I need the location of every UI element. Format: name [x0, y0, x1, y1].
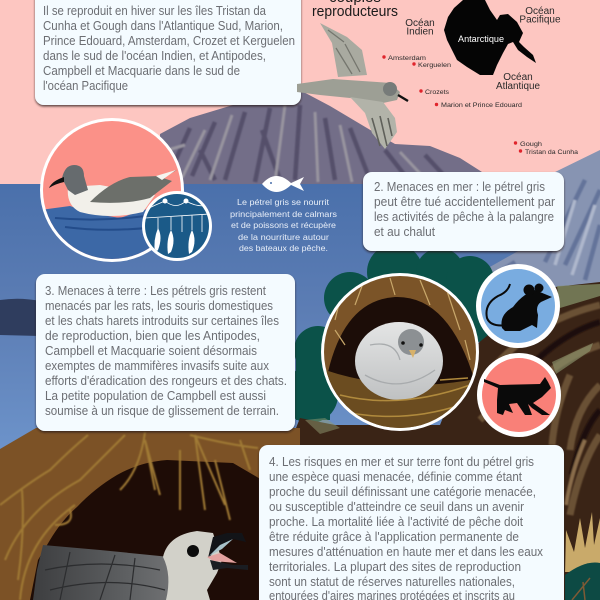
map labels: Océan	[503, 72, 533, 83]
card 1: dans le sud de l'océan Indien, et Antipodes,	[43, 49, 266, 63]
card 4: proche du seuil définissant une catégorie menacée,	[269, 485, 536, 499]
card 2	[363, 172, 564, 251]
grass tuft and green corner	[565, 512, 600, 600]
map labels: Pacifique	[519, 14, 561, 26]
icon: mouse	[476, 264, 560, 348]
card 2: et au chalut	[374, 225, 435, 239]
sea caption: des bateaux de pêche.	[239, 243, 328, 253]
map labels: Atlantique	[496, 81, 540, 92]
card 3: efforts d'éradication des rongeurs et des chats.	[45, 374, 287, 388]
background: sea	[0, 184, 600, 464]
card 4: mesures d'atténuation en haute mer et dans les eaux	[269, 545, 544, 559]
map labels: Océan	[525, 6, 555, 17]
map: breeding sites: Amsterdam	[388, 55, 426, 62]
sea caption: Le pétrel gris se nourrit	[237, 197, 330, 207]
distant island	[0, 299, 40, 336]
map labels: Antarctique	[458, 34, 504, 44]
card 2: les activités de pêche à la palangre	[374, 210, 554, 224]
map labels	[405, 6, 561, 92]
central volcano	[160, 88, 490, 184]
map: breeding sites: Tristan da Cunha	[525, 149, 578, 156]
card 3: soumise à un risque de glissement de terrain.	[45, 404, 279, 418]
green bushes	[282, 244, 502, 423]
sea caption: de la nourriture autour	[238, 232, 329, 242]
map: breeding sites: Crozets	[425, 89, 450, 96]
icon: white fish	[262, 176, 304, 192]
icon: longline fishing	[142, 191, 212, 261]
callout circle: chick in burrow	[320, 270, 480, 435]
card 3: menacés par les rats, les souris domestiques	[45, 299, 273, 313]
petrel close-up in burrow	[33, 531, 248, 600]
card 3: La petite population de Campbell est aussi	[45, 389, 266, 403]
card 2: peut être tué accidentellement par	[374, 195, 555, 209]
brown burrow with dark hole and roots	[0, 428, 300, 600]
flying petrel	[297, 23, 408, 149]
card 4: sont un statut de réserves naturelles nationales,	[269, 575, 515, 589]
card 4: territoriales. La plupart des sites de reproduction	[269, 560, 521, 574]
earth slope right	[296, 282, 600, 600]
map: breeding sites: Gough	[520, 141, 542, 148]
card 4: ou susceptible d'atteindre ce seuil dans un avenir	[269, 500, 524, 514]
card 3: de reproduction, bien que les Antipodes,	[45, 329, 260, 343]
sea caption	[230, 197, 337, 253]
right mountain	[488, 150, 600, 310]
card 4: une espèce quasi menacée, définie comme étant	[269, 470, 522, 484]
card 3: 3. Menaces à terre : Les pétrels gris restent	[45, 284, 266, 298]
map: breeding sites: Marion et Prince Edouard	[441, 102, 522, 109]
card 3: et les chats harets introduits sur certaines îles	[45, 314, 279, 328]
map labels: Océan	[405, 18, 435, 29]
card 3: exemptes de mammifères invasifs suite aux	[45, 359, 270, 373]
card 4: 4. Les risques en mer et sur terre font du pétrel gris	[269, 455, 534, 469]
card 1: Prince Edouard, Amsterdam, Crozet et Kerguelen	[43, 34, 295, 48]
sea caption: et de poissons et récupère	[231, 220, 336, 230]
card 1	[35, 0, 301, 105]
card 3: Campbell et Macquarie soient désormais	[45, 344, 257, 358]
sea caption: principalement de calmars	[230, 209, 337, 219]
background: pink sky	[0, 0, 600, 190]
card 1: Campbell et Macquarie dans le sud de	[43, 64, 240, 78]
callout circle: swimming petrel	[40, 118, 184, 262]
icon: cat	[477, 353, 561, 437]
card 4: proche. La mortalité liée à l'activité de pêche doit	[269, 515, 523, 529]
heading: couples reproducteurs: reproducteurs	[312, 3, 398, 20]
card 1: l'océan Pacifique	[43, 79, 128, 93]
map: Antarctica	[444, 0, 536, 75]
card 1: Il se reproduit en hiver sur les îles Tristan da	[43, 4, 266, 18]
card 4: être réduite grâce à l'application permanente de	[269, 530, 519, 544]
map labels: Indien	[406, 26, 434, 38]
card 3	[36, 274, 295, 431]
map: breeding sites	[382, 55, 578, 156]
card 4	[259, 445, 564, 600]
card 2: 2. Menaces en mer : le pétrel gris	[374, 180, 545, 194]
map: breeding sites: Kerguelen	[418, 62, 451, 69]
card 1: Cunha et Gough dans l'Atlantique Sud, Marion,	[43, 19, 283, 33]
